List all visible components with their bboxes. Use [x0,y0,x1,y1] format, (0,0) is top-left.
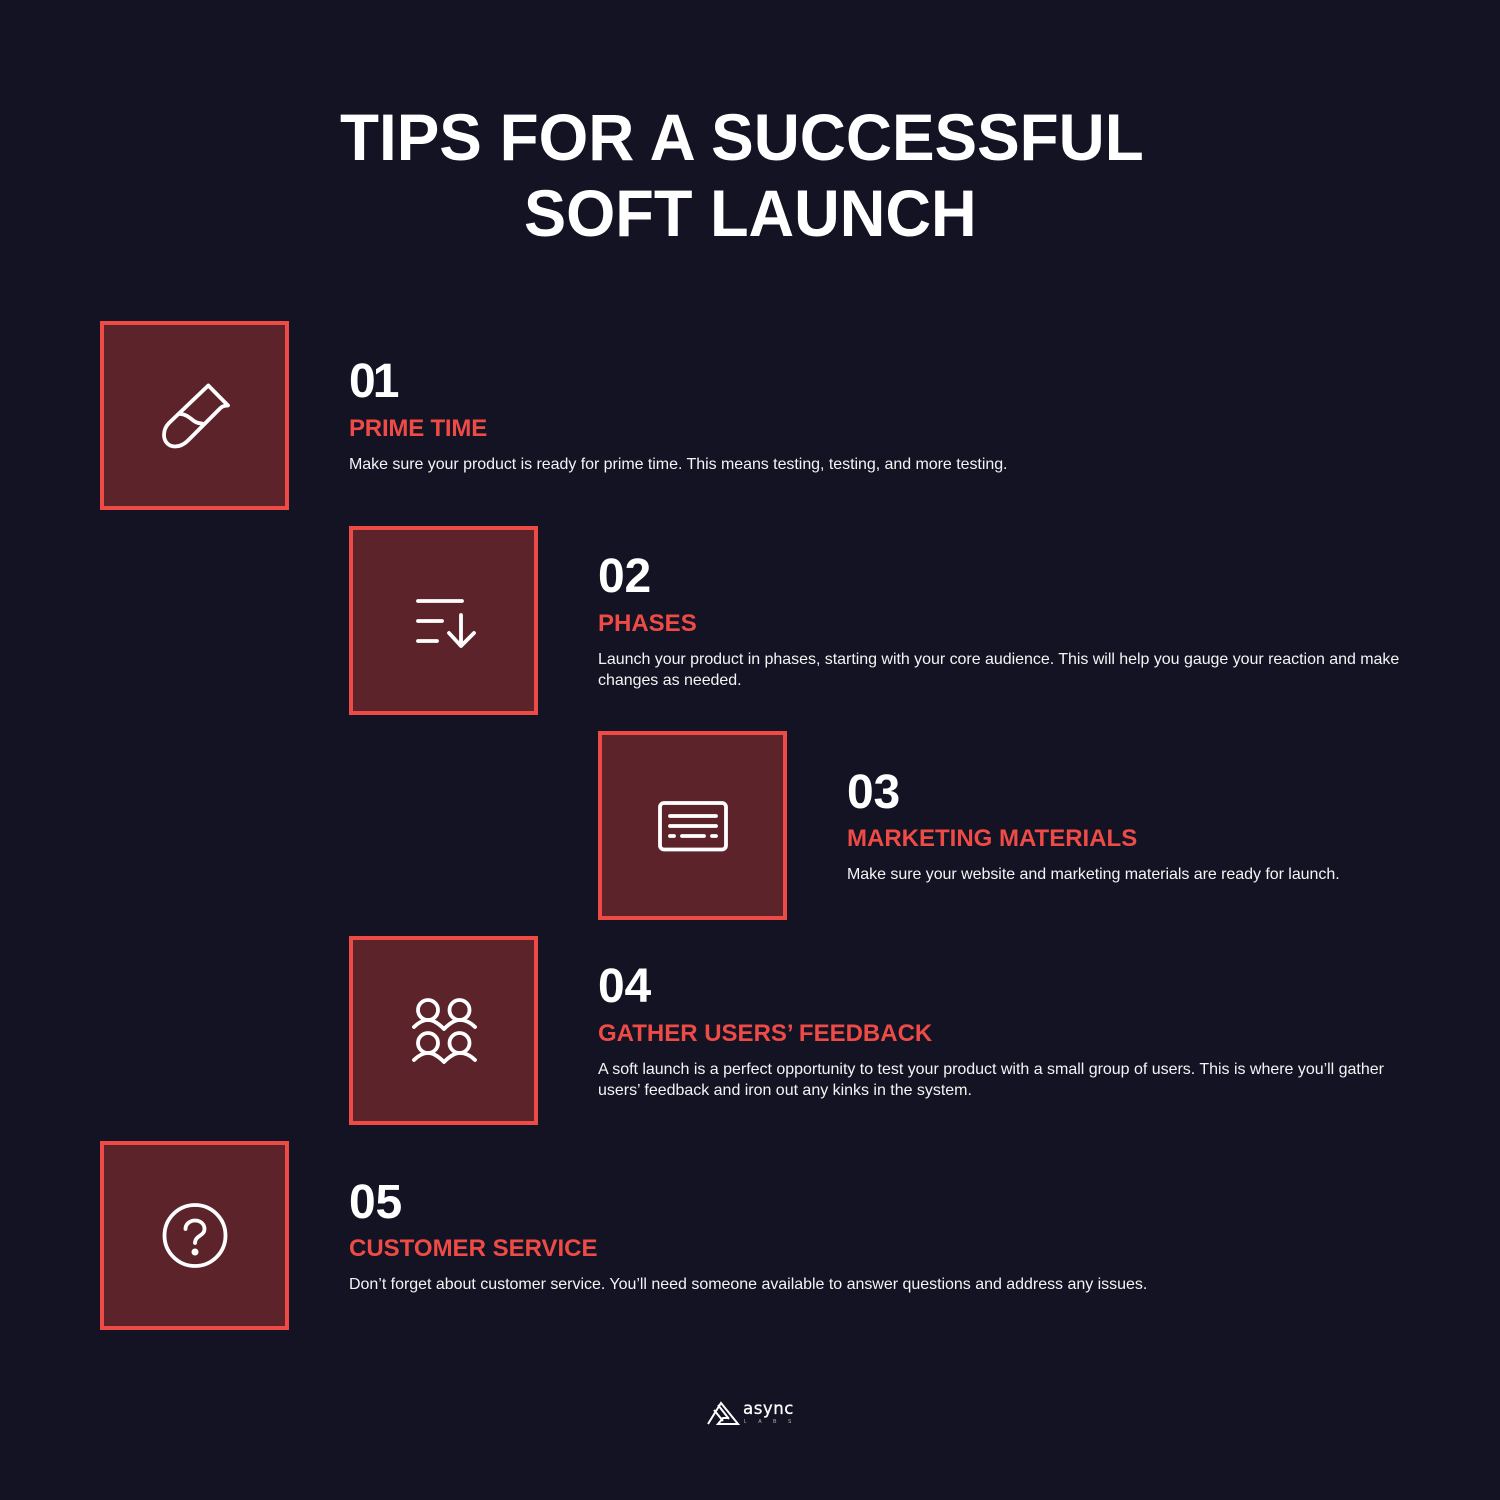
heading: PHASES [598,610,697,637]
number 04: 04 [598,960,651,1013]
heading: PRIME TIME [349,415,487,442]
description: Make sure your product is ready for prime time. This means testing, testing, and more testing. [349,456,1007,473]
wordmark: async [743,1399,794,1419]
title: TIPS FOR A SUCCESSFUL [340,100,1144,174]
number 01: 01 [349,355,396,408]
heading: CUSTOMER SERVICE [349,1235,598,1262]
icon: logo triangles [707,1401,740,1425]
number 05: 05 [349,1176,402,1229]
number 02: 02 [598,550,651,603]
heading: GATHER USERS’ FEEDBACK [598,1020,932,1047]
description: Launch your product in phases, starting with your core audience. This will help you gauge your reaction and make [598,651,1399,668]
heading: MARKETING MATERIALS [847,825,1137,852]
icon: document card [598,731,787,920]
description: users’ feedback and iron out any kinks in the system. [598,1082,972,1099]
description: changes as needed. [598,672,742,689]
icon: test tube [100,321,289,510]
wordmark labs: LABS [744,1419,803,1425]
icon: sort list with down arrow [349,526,538,715]
panel: tip 05 customer service [100,1141,1147,1330]
number 03: 03 [847,766,900,819]
title: SOFT LAUNCH [524,176,977,250]
description [598,651,1399,689]
title [340,100,1144,250]
description [598,1061,1384,1099]
panel: tip 03 marketing materials [598,731,1340,920]
icon: group of users [349,936,538,1125]
description: A soft launch is a perfect opportunity to test your product with a small group of users. This is where you’ll gather [598,1061,1384,1078]
logo: async labs [707,1399,803,1425]
description: Make sure your website and marketing materials are ready for launch. [847,866,1340,883]
icon: question mark in circle [100,1141,289,1330]
panel: tip 04 gather users' feedback [349,936,1384,1125]
panel: tip 02 phases [349,526,1399,715]
description: Don’t forget about customer service. You’ll need someone available to answer questions and address any issues. [349,1276,1147,1293]
panel: tip 01 prime time [100,321,1007,510]
